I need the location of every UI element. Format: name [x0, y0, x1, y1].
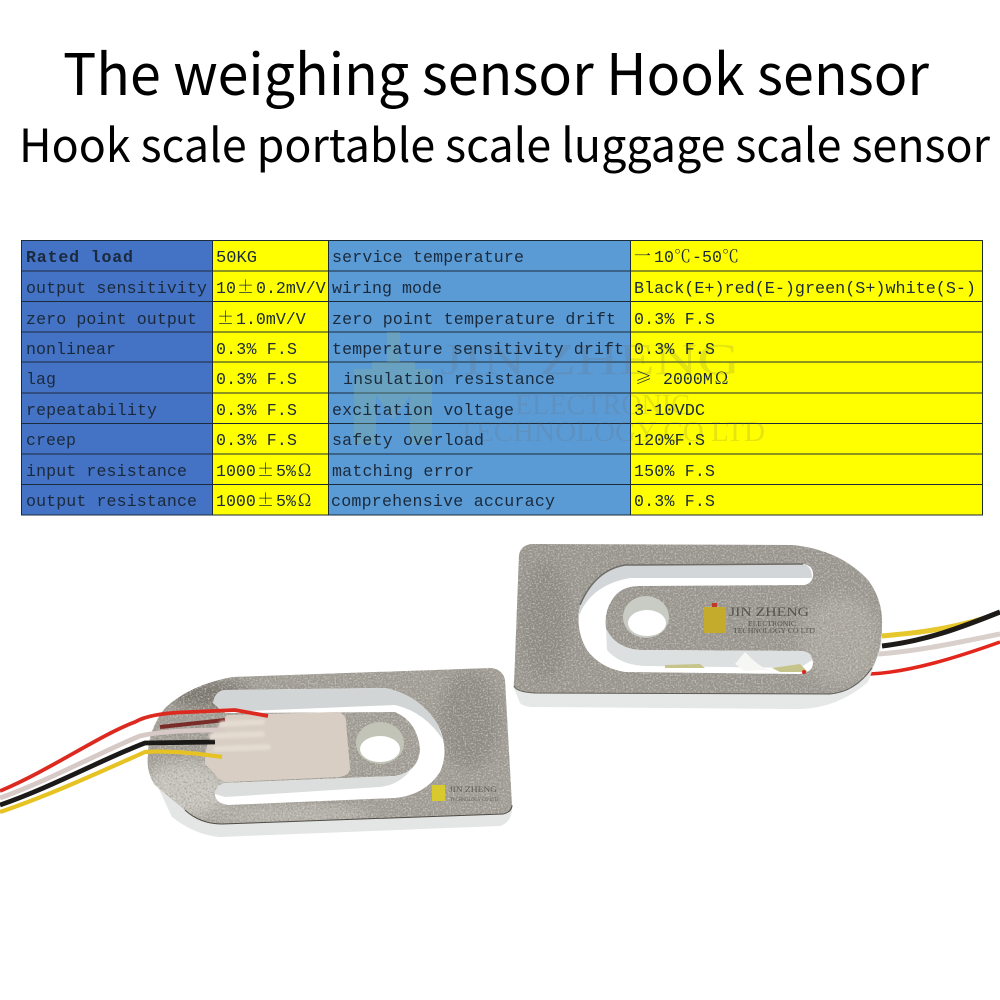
table column 1 labels: repeatability: [26, 401, 157, 420]
table column 2 values: ±: [257, 456, 274, 481]
engraved logo: [704, 603, 726, 633]
table column 2 values: 5%: [276, 462, 296, 481]
table column 4 values: 0.3% F.S: [634, 310, 715, 329]
table column 2 values: 5%: [276, 492, 296, 511]
table column 2 values: 1000: [216, 462, 256, 481]
table column 4 values: ℃: [722, 242, 739, 267]
mounting hole: [623, 596, 669, 638]
wires: left plate: [0, 710, 268, 812]
table column 4 values: 150% F.S: [634, 462, 715, 481]
mounting hole: [356, 722, 404, 764]
table column 3 labels: temperature sensitivity drift: [332, 340, 624, 359]
table column 3 labels: service temperature: [332, 248, 524, 267]
table column 4 values: 一: [634, 242, 651, 267]
table column 2 values: 0.3% F.S: [216, 401, 297, 420]
table column 1 labels: Rated load: [26, 248, 133, 267]
table column 2 values: 50KG: [216, 248, 257, 267]
table column 3 labels: safety overload: [332, 431, 484, 450]
table column 4 values: 10: [654, 248, 674, 267]
watermark text: ELECTRONIC: [515, 389, 690, 421]
table column 2 values: ±: [257, 486, 274, 511]
table column 4 values: 0.3% F.S: [634, 492, 715, 511]
table column 2 values: 10: [216, 279, 236, 298]
engraved text: TECHNOLOGY CO LTD: [450, 798, 498, 803]
table column 4 values: -: [692, 248, 702, 267]
table column 1 labels: input resistance: [26, 462, 187, 481]
table column 4 values: ℃: [674, 242, 691, 267]
table column 3 labels: [331, 248, 624, 511]
seam line: [514, 668, 872, 694]
sensor photo: left plate: [0, 660, 520, 837]
plate top face: [510, 540, 890, 700]
table column 3 labels: insulation resistance: [343, 370, 555, 389]
table column 3 labels: excitation voltage: [332, 401, 514, 420]
specification table: [21, 240, 982, 515]
plate top face: [148, 668, 512, 824]
table column 2 values: [216, 248, 326, 511]
table column 1 labels: [26, 248, 207, 511]
watermark text: [440, 335, 765, 448]
table column 2 values: 0.3% F.S: [216, 370, 297, 389]
table column 2 values: 0.3% F.S: [216, 431, 297, 450]
table column 2 values: 0.2mV/V: [256, 279, 326, 298]
table column 1 labels: output resistance: [26, 492, 197, 511]
plate edge: [150, 770, 512, 837]
table column 4 values: Black(E+)red(E-)green(S+)white(S-): [634, 279, 976, 298]
engraved text: JIN ZHENG: [729, 604, 809, 619]
table column 2 values: Ω: [298, 486, 311, 511]
table column 1 labels: nonlinear: [26, 340, 116, 359]
table column 2 values: 1000: [216, 492, 256, 511]
table column 4 values: 120%F.S: [634, 431, 705, 450]
table column 4 values: 3-10VDC: [634, 401, 705, 420]
table column 3 labels: comprehensive accuracy: [331, 492, 555, 511]
potting compound: [205, 712, 350, 782]
yellow engraved logo: [432, 785, 445, 801]
table column 4 values: ≥: [635, 364, 652, 389]
watermark logo: [354, 332, 432, 444]
table column 1 labels: creep: [26, 431, 76, 450]
table column 4 values: 0.3% F.S: [634, 340, 715, 359]
engraved text: TECHNOLOGY CO LTD: [733, 627, 815, 635]
table column 4 values: [634, 242, 976, 511]
table column 2 values: 1.0mV/V: [236, 310, 306, 329]
table column 4 values: 50: [702, 248, 722, 267]
table column 3 labels: matching error: [332, 462, 474, 481]
table column 2 values: Ω: [298, 456, 311, 481]
table column 2 values: ±: [237, 273, 254, 298]
table column 2 values: 0.3% F.S: [216, 340, 297, 359]
table column 3 labels: wiring mode: [332, 279, 442, 298]
engraved text: ELECTRONIC: [748, 620, 796, 628]
subtitle: Hook scale portable scale luggage scale sensor: [19, 110, 990, 176]
sensor photo: right plate: [510, 540, 1000, 709]
wires: right plate: [870, 612, 1000, 674]
table column 4 values: 2000M: [663, 370, 713, 389]
plate edge: [513, 625, 882, 709]
title: The weighing sensor Hook sensor: [63, 30, 930, 112]
table column 4 values: Ω: [715, 364, 728, 389]
table column 3 labels: zero point temperature drift: [332, 310, 616, 329]
table column 1 labels: zero point output: [26, 310, 197, 329]
engraved text: [449, 785, 498, 803]
watermark text: JIN ZHENG: [440, 335, 740, 384]
table column 1 labels: lag: [26, 370, 56, 389]
engraved text: JIN ZHENG: [449, 785, 497, 794]
engraved text: [729, 604, 815, 635]
slot: [579, 564, 813, 674]
potting fingers over wires: [212, 722, 268, 749]
seam line: [185, 805, 512, 824]
slot: [213, 688, 445, 805]
table column 1 labels: output sensitivity: [26, 279, 207, 298]
table column 2 values: ±: [217, 304, 234, 329]
watermark text: TECHNOLOGY CO LTD: [458, 416, 765, 448]
